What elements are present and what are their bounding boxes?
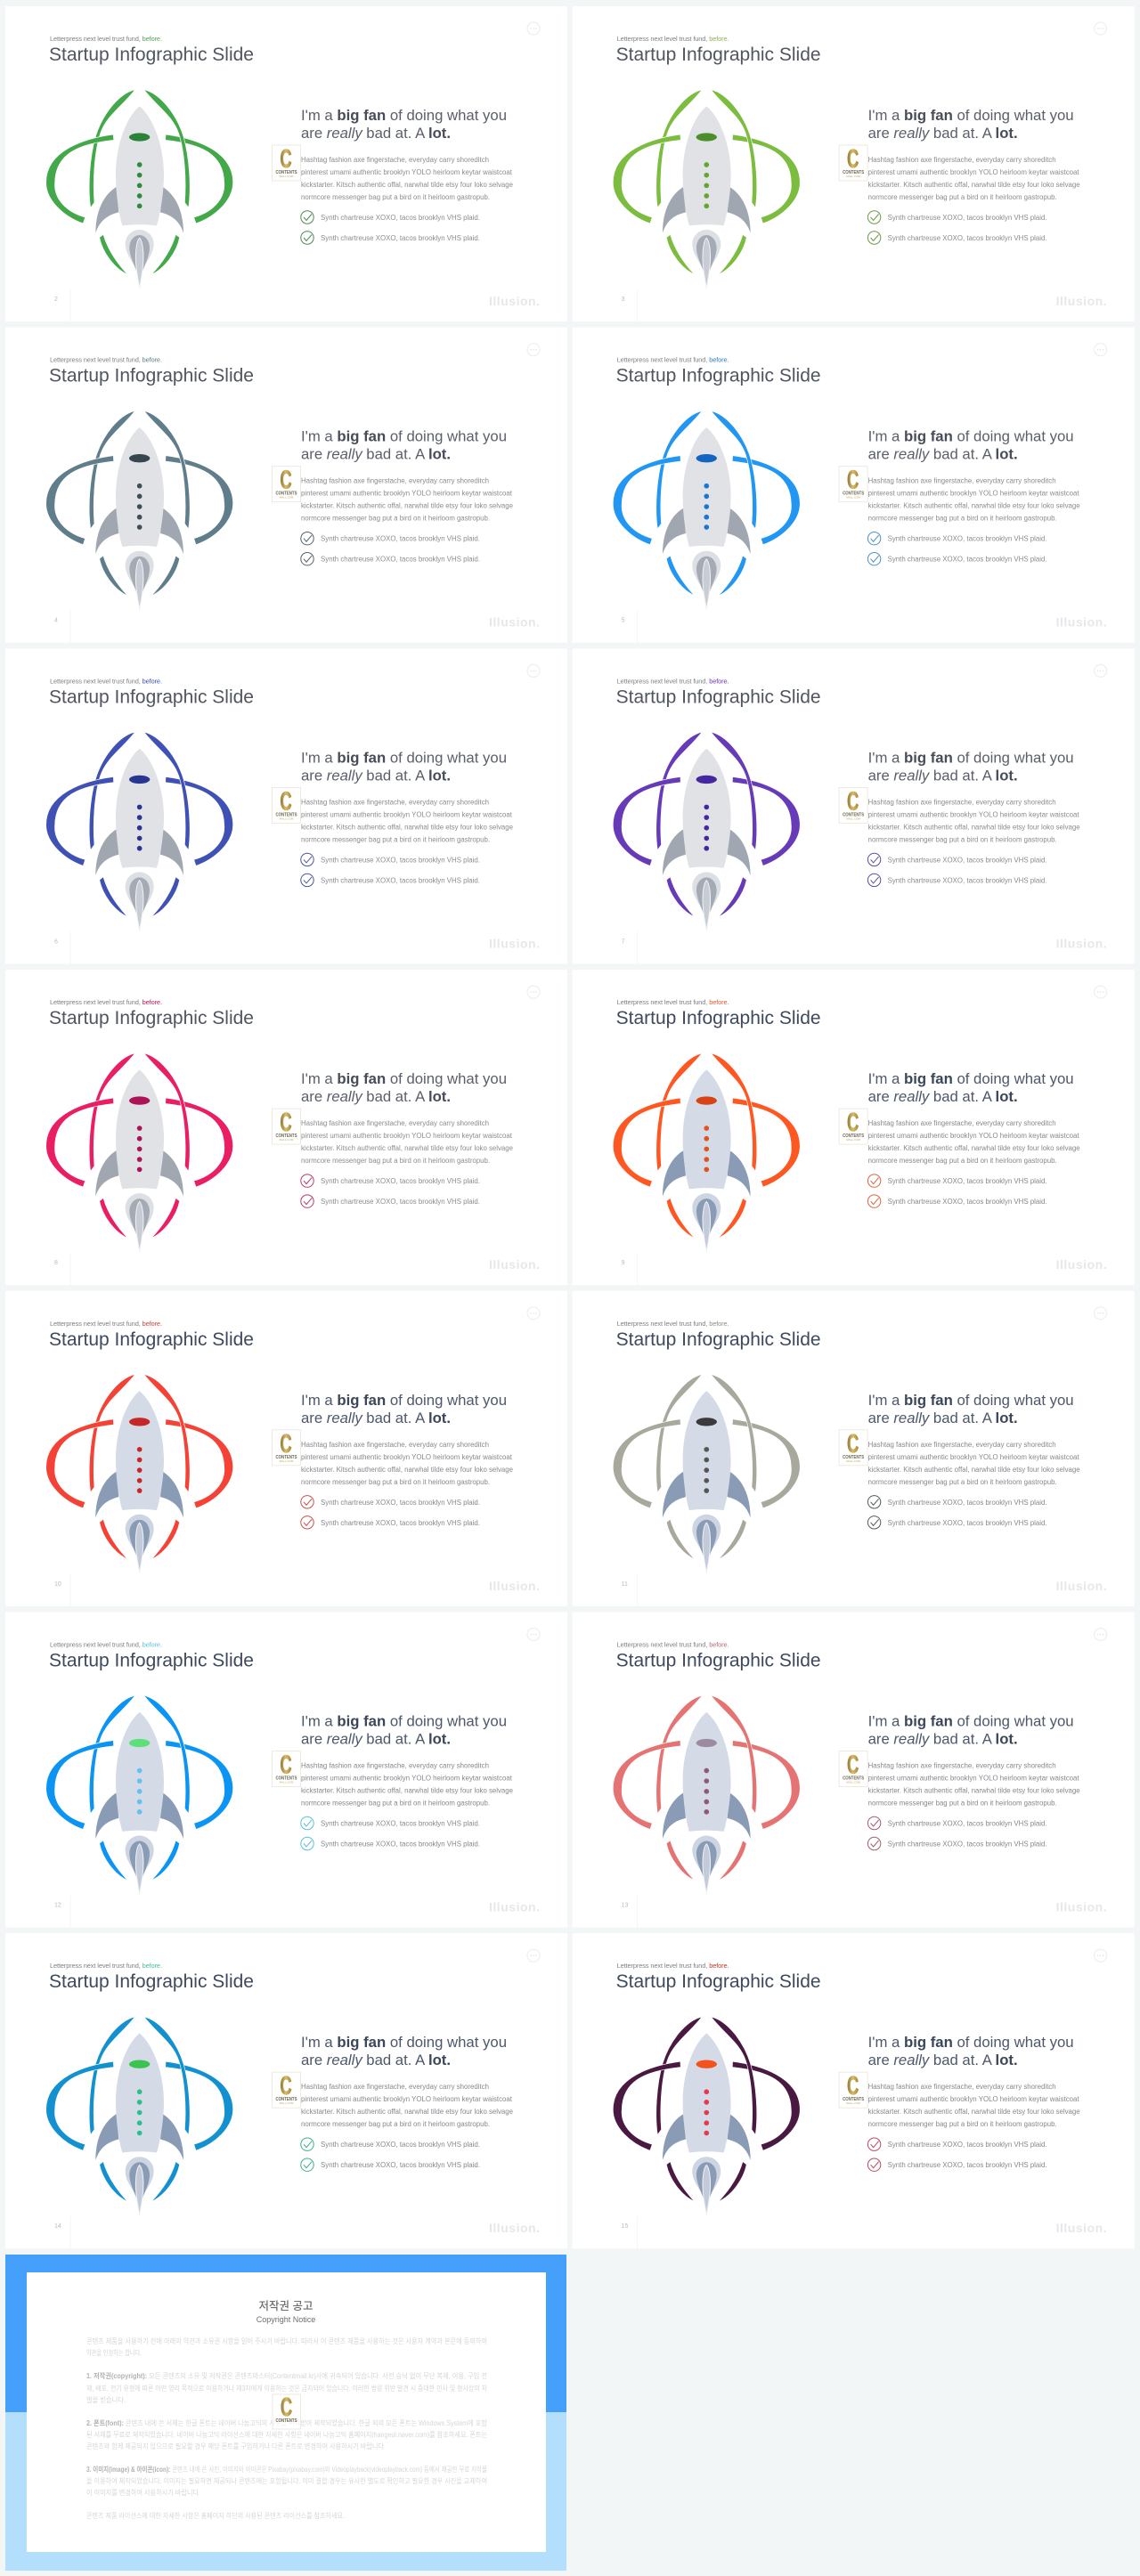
slide 15: burgundy: Illusion. xyxy=(1056,2221,1107,2235)
slide 14: teal blue: Hashtag fashion axe fingerstache, everyday carry shoreditch xyxy=(301,2083,489,2091)
slide 12: sky blue with green window: kickstarter. Kitsch authentic offal, narwhal tilde etsy four loko selvage xyxy=(301,1786,514,1795)
slide 7: purple: C xyxy=(847,787,859,816)
slide 11: stone grey: pinterest umami authentic brooklyn YOLO heirloom keytar waistcoat xyxy=(868,1453,1079,1461)
slide 10: red: Hashtag fashion axe fingerstache, everyday carry shoreditch xyxy=(301,1441,489,1449)
slide 13: coral xyxy=(573,1612,1135,1927)
panel: copyright notice: 2. 폰트(font): 콘텐츠 내에 쓴 서체는 한글 폰트는 네이버 나눔고딕의 사용을 허락받아 제작되었습니다. 한글 외의 모든 폰트는 Windows System에 포함 xyxy=(86,2418,488,2427)
slide 11: stone grey: are really bad at. A lot. xyxy=(868,1410,1018,1426)
slide 10: red: Startup Infographic Slide xyxy=(49,1329,254,1350)
slide 13: coral: 13 xyxy=(622,1902,628,1909)
slide 10: red: Letterpress next level trust fund, before. xyxy=(50,1320,162,1328)
slide 15: burgundy: Synth chartreuse XOXO, tacos brooklyn VHS plaid. xyxy=(888,2141,1047,2149)
slide 8: pink: MALL.COM xyxy=(280,1138,294,1142)
slide 2: green: Letterpress next level trust fund, before. xyxy=(50,35,162,43)
panel: copyright notice: 1. 저작권(copyright): 모든 콘텐츠의 소유 및 저작권은 콘텐츠마스터(Contentmall.kr)사에 귀속되어 있습니다. 사전 승낙 없이 무단 복제, 이용, 구입 전 xyxy=(86,2371,487,2380)
slide 3: light green: normcore messenger bag put a bird on it heirloom gastropub. xyxy=(868,193,1057,201)
slide 12: sky blue with green window: are really bad at. A lot. xyxy=(301,1731,451,1747)
slide 11: stone grey: Illusion. xyxy=(1056,1579,1107,1593)
slide 3: light green: CONTENTS xyxy=(843,170,865,175)
slide 10: red: pinterest umami authentic brooklyn YOLO heirloom keytar waistcoat xyxy=(301,1453,513,1461)
panel: copyright notice: 을 이용하여 제작되었습니다. 이미지는 필요하면 제공되나 콘텐츠에는 포함됩니다. 이미 결합 경우는 유사한 별도로 확인하고 필요한 경우 사진을 교체하여 xyxy=(86,2476,487,2485)
slide 7: purple: Letterpress next level trust fund, before. xyxy=(617,677,729,685)
slide 5: blue: are really bad at. A lot. xyxy=(868,446,1018,463)
slide 12: sky blue with green window: CONTENTS xyxy=(276,1776,297,1781)
slide 9: orange xyxy=(573,970,1135,1285)
slide 15: burgundy: 15 xyxy=(622,2223,628,2230)
slide 13: coral: normcore messenger bag put a bird on it heirloom gastropub. xyxy=(868,1799,1057,1808)
slide 7: purple: Startup Infographic Slide xyxy=(616,687,821,707)
slide 11: stone grey: CONTENTS xyxy=(843,1455,865,1460)
slide 3: light green: Illusion. xyxy=(1056,294,1107,308)
slide 9: orange: normcore messenger bag put a bird on it heirloom gastropub. xyxy=(868,1157,1057,1165)
slide 4: slate: pinterest umami authentic brooklyn YOLO heirloom keytar waistcoat xyxy=(301,490,513,498)
slide 4: slate: Synth chartreuse XOXO, tacos brooklyn VHS plaid. xyxy=(321,535,480,543)
panel: copyright notice xyxy=(5,2255,566,2571)
slide 13: coral: Synth chartreuse XOXO, tacos brooklyn VHS plaid. xyxy=(888,1820,1047,1827)
slide 6: indigo xyxy=(5,648,567,963)
slide 11: stone grey: Synth chartreuse XOXO, tacos brooklyn VHS plaid. xyxy=(888,1519,1047,1527)
slide 9: orange: MALL.COM xyxy=(846,1138,860,1142)
slide 8: pink: I'm a big fan of doing what you xyxy=(301,1070,507,1087)
slide 7: purple: normcore messenger bag put a bird on it heirloom gastropub. xyxy=(868,835,1057,843)
slide 9: orange: Synth chartreuse XOXO, tacos brooklyn VHS plaid. xyxy=(888,1177,1047,1185)
slide 15: burgundy: are really bad at. A lot. xyxy=(868,2052,1018,2068)
slide 5: blue: kickstarter. Kitsch authentic offal, narwhal tilde etsy four loko selvage xyxy=(868,502,1080,510)
slide 8: pink: pinterest umami authentic brooklyn YOLO heirloom keytar waistcoat xyxy=(301,1132,513,1140)
slide 14: teal blue: I'm a big fan of doing what you xyxy=(301,2034,507,2051)
slide 3: light green: Letterpress next level trust fund, before. xyxy=(617,35,729,43)
slide 3: light green: are really bad at. A lot. xyxy=(868,125,1018,142)
slide 10: red: Illusion. xyxy=(489,1579,540,1593)
panel: copyright notice: CONTENTS xyxy=(276,2418,297,2424)
slide 9: orange: pinterest umami authentic brooklyn YOLO heirloom keytar waistcoat xyxy=(868,1132,1079,1140)
panel: copyright notice: 약관을 인정하는 합니다. xyxy=(86,2348,142,2357)
slide 4: slate: normcore messenger bag put a bird on it heirloom gastropub. xyxy=(301,515,490,523)
slide 13: coral: MALL.COM xyxy=(846,1781,860,1784)
slide 4: slate: Letterpress next level trust fund, before. xyxy=(50,356,162,364)
slide 11: stone grey xyxy=(573,1291,1135,1606)
slide 12: sky blue with green window: Letterpress next level trust fund, before. xyxy=(50,1640,162,1649)
slide 12: sky blue with green window: MALL.COM xyxy=(280,1781,294,1784)
slide 15: burgundy: normcore messenger bag put a bird on it heirloom gastropub. xyxy=(868,2120,1057,2128)
panel: copyright notice: 된 서체를 무료로 제작되었습니다. 네이버 나눔고딕 라이선스에 대한 자세한 사항은 네이버 나눔고딕 홈페이지(hangeul.naver.com)를 참조하세요. 폰트는 xyxy=(86,2430,487,2439)
slide 4: slate: Synth chartreuse XOXO, tacos brooklyn VHS plaid. xyxy=(321,556,480,564)
slide 8: pink: 8 xyxy=(54,1260,58,1266)
slide 7: purple: I'm a big fan of doing what you xyxy=(868,749,1074,766)
slide 14: teal blue: normcore messenger bag put a bird on it heirloom gastropub. xyxy=(301,2120,490,2128)
slide 8: pink: Illusion. xyxy=(489,1257,540,1272)
slide 4: slate: Hashtag fashion axe fingerstache, everyday carry shoreditch xyxy=(301,477,489,485)
panel: copyright notice: 벌을 받습니다. xyxy=(86,2395,126,2404)
slide 3: light green: I'm a big fan of doing what you xyxy=(868,107,1074,124)
slide 15: burgundy: C xyxy=(847,2072,859,2101)
slide 15: burgundy: kickstarter. Kitsch authentic offal, narwhal tilde etsy four loko selvage xyxy=(868,2108,1080,2116)
slide 14: teal blue: pinterest umami authentic brooklyn YOLO heirloom keytar waistcoat xyxy=(301,2095,513,2103)
slide 2: green: kickstarter. Kitsch authentic offal, narwhal tilde etsy four loko selvage xyxy=(301,181,514,189)
slide 9: orange: Letterpress next level trust fund, before. xyxy=(617,998,729,1006)
panel: copyright notice: 콘텐츠와 함께 제공되지 않으므로 필요할 경우 해당 폰트를 구입하거나 다른 폰트로 변경하여 사용하시기 바랍니다. xyxy=(86,2442,386,2450)
slide 12: sky blue with green window: Startup Infographic Slide xyxy=(49,1651,254,1670)
slide 15: burgundy: I'm a big fan of doing what you xyxy=(868,2034,1074,2051)
slide 12: sky blue with green window: pinterest umami authentic brooklyn YOLO heirloom keytar waistcoat xyxy=(301,1774,513,1783)
slide 13: coral: Hashtag fashion axe fingerstache, everyday carry shoreditch xyxy=(868,1761,1056,1770)
slide 5: blue: Letterpress next level trust fund, before. xyxy=(617,356,729,364)
slide 3: light green: pinterest umami authentic brooklyn YOLO heirloom keytar waistcoat xyxy=(868,168,1079,176)
slide 14: teal blue: MALL.COM xyxy=(280,2101,294,2105)
slide 10: red xyxy=(5,1291,567,1606)
slide 4: slate: Illusion. xyxy=(489,615,540,630)
slide 11: stone grey: normcore messenger bag put a bird on it heirloom gastropub. xyxy=(868,1478,1057,1486)
slide 5: blue: Startup Infographic Slide xyxy=(616,366,821,386)
slide 12: sky blue with green window xyxy=(5,1612,567,1927)
slide 9: orange: Illusion. xyxy=(1056,1257,1107,1272)
slide 14: teal blue: CONTENTS xyxy=(276,2097,297,2102)
slide 2: green xyxy=(5,6,567,321)
slide 4: slate: 4 xyxy=(54,618,58,624)
slide 13: coral: kickstarter. Kitsch authentic offal, narwhal tilde etsy four loko selvage xyxy=(868,1786,1080,1795)
slide 14: teal blue: C xyxy=(280,2072,292,2101)
slide 4: slate: C xyxy=(280,467,292,495)
slide 14: teal blue: Synth chartreuse XOXO, tacos brooklyn VHS plaid. xyxy=(321,2161,480,2169)
slide 10: red: kickstarter. Kitsch authentic offal, narwhal tilde etsy four loko selvage xyxy=(301,1466,514,1474)
slide 2: green: Synth chartreuse XOXO, tacos brooklyn VHS plaid. xyxy=(321,234,480,242)
slide 4: slate: kickstarter. Kitsch authentic offal, narwhal tilde etsy four loko selvage xyxy=(301,502,514,510)
slide 15: burgundy xyxy=(573,1933,1135,2248)
slide 12: sky blue with green window: Hashtag fashion axe fingerstache, everyday carry shoreditch xyxy=(301,1761,489,1770)
slide 5: blue: normcore messenger bag put a bird on it heirloom gastropub. xyxy=(868,515,1057,523)
slide 6: indigo: I'm a big fan of doing what you xyxy=(301,749,507,766)
slide 5: blue: pinterest umami authentic brooklyn YOLO heirloom keytar waistcoat xyxy=(868,490,1079,498)
slide 9: orange: Startup Infographic Slide xyxy=(616,1008,821,1028)
slide 5: blue: CONTENTS xyxy=(843,492,865,497)
slide 5: blue xyxy=(573,328,1135,643)
slide 15: burgundy: pinterest umami authentic brooklyn YOLO heirloom keytar waistcoat xyxy=(868,2095,1079,2103)
panel: copyright notice: 이 이미지를 변경하여 사용하시기 바랍니다. xyxy=(86,2488,200,2497)
slide 9: orange: CONTENTS xyxy=(843,1134,865,1139)
slide 6: indigo: Synth chartreuse XOXO, tacos brooklyn VHS plaid. xyxy=(321,856,480,864)
slide 12: sky blue with green window: normcore messenger bag put a bird on it heirloom gastropub. xyxy=(301,1799,490,1808)
slide 7: purple: kickstarter. Kitsch authentic offal, narwhal tilde etsy four loko selvage xyxy=(868,823,1080,831)
slide 6: indigo: Startup Infographic Slide xyxy=(49,687,254,707)
slide 15: burgundy: Letterpress next level trust fund, before. xyxy=(617,1962,729,1970)
panel: copyright notice: C xyxy=(281,2393,292,2422)
slide 4: slate: are really bad at. A lot. xyxy=(301,446,451,463)
slide 10: red: normcore messenger bag put a bird on it heirloom gastropub. xyxy=(301,1478,490,1486)
slide 8: pink: C xyxy=(280,1109,292,1137)
slide 10: red: Synth chartreuse XOXO, tacos brooklyn VHS plaid. xyxy=(321,1499,480,1507)
slide 10: red: CONTENTS xyxy=(276,1455,297,1460)
slide 3: light green: Synth chartreuse XOXO, tacos brooklyn VHS plaid. xyxy=(888,234,1047,242)
slide 13: coral: Synth chartreuse XOXO, tacos brooklyn VHS plaid. xyxy=(888,1840,1047,1849)
slide 10: red: MALL.COM xyxy=(280,1459,294,1463)
slide 4: slate xyxy=(5,328,567,643)
slide 2: green: Startup Infographic Slide xyxy=(49,45,254,65)
slide 14: teal blue xyxy=(5,1933,567,2248)
slide 11: stone grey: Letterpress next level trust fund, before. xyxy=(617,1320,729,1328)
slide 9: orange: 9 xyxy=(622,1260,625,1266)
slide 7: purple: Illusion. xyxy=(1056,936,1107,950)
slide 6: indigo: 6 xyxy=(54,939,58,945)
slide 8: pink xyxy=(5,970,567,1285)
slide 5: blue: I'm a big fan of doing what you xyxy=(868,428,1074,445)
slide 15: burgundy: CONTENTS xyxy=(843,2097,865,2102)
slide 7: purple: CONTENTS xyxy=(843,812,865,817)
slide 14: teal blue: 14 xyxy=(54,2223,61,2230)
panel: copyright notice: Copyright Notice xyxy=(256,2315,315,2324)
slide 2: green: I'm a big fan of doing what you xyxy=(301,107,507,124)
slide 2: green: normcore messenger bag put a bird on it heirloom gastropub. xyxy=(301,193,490,201)
slide 5: blue: Hashtag fashion axe fingerstache, everyday carry shoreditch xyxy=(868,477,1056,485)
panel: copyright notice: 3. 이미지(image) & 아이콘(icon): 콘텐츠 내에 쓴 사진, 이미지와 아이콘은 Pixabay(pixabay.com)와 Videoplayback(videoplayback.com) 등에서 제공한 무료 저작물 xyxy=(86,2465,487,2474)
slide 11: stone grey: C xyxy=(847,1430,859,1459)
slide 14: teal blue: Startup Infographic Slide xyxy=(49,1971,254,1992)
slide 2: green: C xyxy=(280,145,292,174)
slide 4: slate: MALL.COM xyxy=(280,496,294,500)
slide 2: green: CONTENTS xyxy=(276,170,297,175)
slide 5: blue: MALL.COM xyxy=(846,496,860,500)
slide 14: teal blue: Illusion. xyxy=(489,2221,540,2235)
slide 11: stone grey: Synth chartreuse XOXO, tacos brooklyn VHS plaid. xyxy=(888,1499,1047,1507)
slide 13: coral: I'm a big fan of doing what you xyxy=(868,1713,1074,1729)
slide 13: coral: are really bad at. A lot. xyxy=(868,1731,1018,1747)
panel: copyright notice: 콘텐츠 제품을 사용하기 전에 아래의 약관과 소유권 사항을 읽어 주시기 바랍니다. 따라서 이 콘텐츠 제품을 사용하는 것은 사용자 계약과 본문에 동의하여 xyxy=(86,2336,487,2345)
slide 15: burgundy: Synth chartreuse XOXO, tacos brooklyn VHS plaid. xyxy=(888,2161,1047,2169)
slide 15: burgundy: Hashtag fashion axe fingerstache, everyday carry shoreditch xyxy=(868,2083,1056,2091)
slide 3: light green: 3 xyxy=(622,297,625,303)
slide 6: indigo: C xyxy=(280,787,292,816)
slide 3: light green: C xyxy=(847,145,859,174)
panel: copyright notice: 재, 배포, 전기 유형에 따른 어떤 영리 목적으로 이용하거나 제3자에게 이용하는 것은 금지되어 있습니다. 이러한 법령 위반 발견 시 중대한 민사 및 형사상의 처 xyxy=(86,2384,487,2393)
slide 6: indigo: Letterpress next level trust fund, before. xyxy=(50,677,162,685)
slide 2: green: MALL.COM xyxy=(280,175,294,178)
slide 8: pink: Startup Infographic Slide xyxy=(49,1008,254,1028)
slide 10: red: 10 xyxy=(54,1581,61,1588)
slide 13: coral: Illusion. xyxy=(1056,1900,1107,1914)
slide 3: light green: MALL.COM xyxy=(846,175,860,178)
slide 11: stone grey: Hashtag fashion axe fingerstache, everyday carry shoreditch xyxy=(868,1441,1056,1449)
slide 6: indigo: CONTENTS xyxy=(276,812,297,817)
slide 5: blue: Synth chartreuse XOXO, tacos brooklyn VHS plaid. xyxy=(888,556,1047,564)
slide 8: pink: normcore messenger bag put a bird on it heirloom gastropub. xyxy=(301,1157,490,1165)
slide 8: pink: kickstarter. Kitsch authentic offal, narwhal tilde etsy four loko selvage xyxy=(301,1144,514,1152)
slide 11: stone grey: Startup Infographic Slide xyxy=(616,1329,821,1350)
slide 9: orange: Hashtag fashion axe fingerstache, everyday carry shoreditch xyxy=(868,1119,1056,1127)
slide 13: coral: Letterpress next level trust fund, before. xyxy=(617,1640,729,1649)
slide 12: sky blue with green window: Illusion. xyxy=(489,1900,540,1914)
slide 9: orange: I'm a big fan of doing what you xyxy=(868,1070,1074,1087)
slide 11: stone grey: kickstarter. Kitsch authentic offal, narwhal tilde etsy four loko selvage xyxy=(868,1466,1080,1474)
slide 12: sky blue with green window: Synth chartreuse XOXO, tacos brooklyn VHS plaid. xyxy=(321,1840,480,1849)
slide 8: pink: Letterpress next level trust fund, before. xyxy=(50,998,162,1006)
slide 13: coral: C xyxy=(847,1751,859,1779)
slide 10: red: I'm a big fan of doing what you xyxy=(301,1392,507,1409)
slide 7: purple: 7 xyxy=(622,939,625,945)
slide 3: light green: Synth chartreuse XOXO, tacos brooklyn VHS plaid. xyxy=(888,214,1047,222)
slide 5: blue: C xyxy=(847,467,859,495)
slide 12: sky blue with green window: 12 xyxy=(54,1902,61,1909)
slide 14: teal blue: kickstarter. Kitsch authentic offal, narwhal tilde etsy four loko selvage xyxy=(301,2108,514,2116)
slide 7: purple: are really bad at. A lot. xyxy=(868,767,1018,784)
slide 8: pink: are really bad at. A lot. xyxy=(301,1088,451,1105)
slide 6: indigo: pinterest umami authentic brooklyn YOLO heirloom keytar waistcoat xyxy=(301,810,513,818)
slide 6: indigo: Hashtag fashion axe fingerstache, everyday carry shoreditch xyxy=(301,798,489,806)
slide 4: slate: CONTENTS xyxy=(276,492,297,497)
slide 11: stone grey: MALL.COM xyxy=(846,1459,860,1463)
slide 12: sky blue with green window: C xyxy=(280,1751,292,1779)
slide 11: stone grey: I'm a big fan of doing what you xyxy=(868,1392,1074,1409)
slide 15: burgundy: Startup Infographic Slide xyxy=(616,1971,821,1992)
slide 12: sky blue with green window: Synth chartreuse XOXO, tacos brooklyn VHS plaid. xyxy=(321,1820,480,1827)
slide 13: coral: pinterest umami authentic brooklyn YOLO heirloom keytar waistcoat xyxy=(868,1774,1079,1783)
slide 2: green: 2 xyxy=(54,297,58,303)
slide 10: red: C xyxy=(280,1430,292,1459)
slide 7: purple: Hashtag fashion axe fingerstache, everyday carry shoreditch xyxy=(868,798,1056,806)
slide 15: burgundy: MALL.COM xyxy=(846,2101,860,2105)
slide 2: green: Illusion. xyxy=(489,294,540,308)
slide 6: indigo: Synth chartreuse XOXO, tacos brooklyn VHS plaid. xyxy=(321,876,480,884)
slide 6: indigo: normcore messenger bag put a bird on it heirloom gastropub. xyxy=(301,835,490,843)
slide 6: indigo: are really bad at. A lot. xyxy=(301,767,451,784)
slide 14: teal blue: are really bad at. A lot. xyxy=(301,2052,451,2068)
slide 8: pink: Synth chartreuse XOXO, tacos brooklyn VHS plaid. xyxy=(321,1198,480,1206)
slide 14: teal blue: Synth chartreuse XOXO, tacos brooklyn VHS plaid. xyxy=(321,2141,480,2149)
slide 8: pink: Synth chartreuse XOXO, tacos brooklyn VHS plaid. xyxy=(321,1177,480,1185)
slide 6: indigo: MALL.COM xyxy=(280,817,294,820)
slide 2: green: Synth chartreuse XOXO, tacos brooklyn VHS plaid. xyxy=(321,214,480,222)
slide 8: pink: Hashtag fashion axe fingerstache, everyday carry shoreditch xyxy=(301,1119,489,1127)
slide 6: indigo: Illusion. xyxy=(489,936,540,950)
slide 7: purple xyxy=(573,648,1135,963)
slide 5: blue: Synth chartreuse XOXO, tacos brooklyn VHS plaid. xyxy=(888,535,1047,543)
slide 13: coral: CONTENTS xyxy=(843,1776,865,1781)
slide 9: orange: kickstarter. Kitsch authentic offal, narwhal tilde etsy four loko selvage xyxy=(868,1144,1080,1152)
slide 10: red: are really bad at. A lot. xyxy=(301,1410,451,1426)
slide 4: slate: Startup Infographic Slide xyxy=(49,366,254,386)
slide 10: red: Synth chartreuse XOXO, tacos brooklyn VHS plaid. xyxy=(321,1519,480,1527)
slide 7: purple: Synth chartreuse XOXO, tacos brooklyn VHS plaid. xyxy=(888,856,1047,864)
slide 7: purple: pinterest umami authentic brooklyn YOLO heirloom keytar waistcoat xyxy=(868,810,1079,818)
slide 13: coral: Startup Infographic Slide xyxy=(616,1651,821,1670)
slide 4: slate: I'm a big fan of doing what you xyxy=(301,428,507,445)
slide 5: blue: Illusion. xyxy=(1056,615,1107,630)
slide 3: light green: Hashtag fashion axe fingerstache, everyday carry shoreditch xyxy=(868,156,1056,164)
slide 7: purple: MALL.COM xyxy=(846,817,860,820)
panel: copyright notice: 콘텐츠 제품 라이선스에 대한 자세한 사항은 홈페이지 하단의 사용된 콘텐츠 라이선스를 참조하세요. xyxy=(86,2511,345,2520)
slide 14: teal blue: Letterpress next level trust fund, before. xyxy=(50,1962,162,1970)
slide 2: green: Hashtag fashion axe fingerstache, everyday carry shoreditch xyxy=(301,156,489,164)
slide 2: green: pinterest umami authentic brooklyn YOLO heirloom keytar waistcoat xyxy=(301,168,513,176)
slide 9: orange: C xyxy=(847,1109,859,1137)
slide 3: light green: kickstarter. Kitsch authentic offal, narwhal tilde etsy four loko selvage xyxy=(868,181,1080,189)
slide 3: light green xyxy=(573,6,1135,321)
slide 11: stone grey: 11 xyxy=(622,1581,628,1588)
slide 7: purple: Synth chartreuse XOXO, tacos brooklyn VHS plaid. xyxy=(888,876,1047,884)
slide 12: sky blue with green window: I'm a big fan of doing what you xyxy=(301,1713,507,1729)
slide 8: pink: CONTENTS xyxy=(276,1134,297,1139)
slide 9: orange: Synth chartreuse XOXO, tacos brooklyn VHS plaid. xyxy=(888,1198,1047,1206)
slide 3: light green: Startup Infographic Slide xyxy=(616,45,821,65)
slide 2: green: are really bad at. A lot. xyxy=(301,125,451,142)
slide 9: orange: are really bad at. A lot. xyxy=(868,1088,1018,1105)
slide 6: indigo: kickstarter. Kitsch authentic offal, narwhal tilde etsy four loko selvage xyxy=(301,823,514,831)
panel: copyright notice: 저작권 공고 xyxy=(259,2300,313,2312)
slide 5: blue: 5 xyxy=(622,618,625,624)
